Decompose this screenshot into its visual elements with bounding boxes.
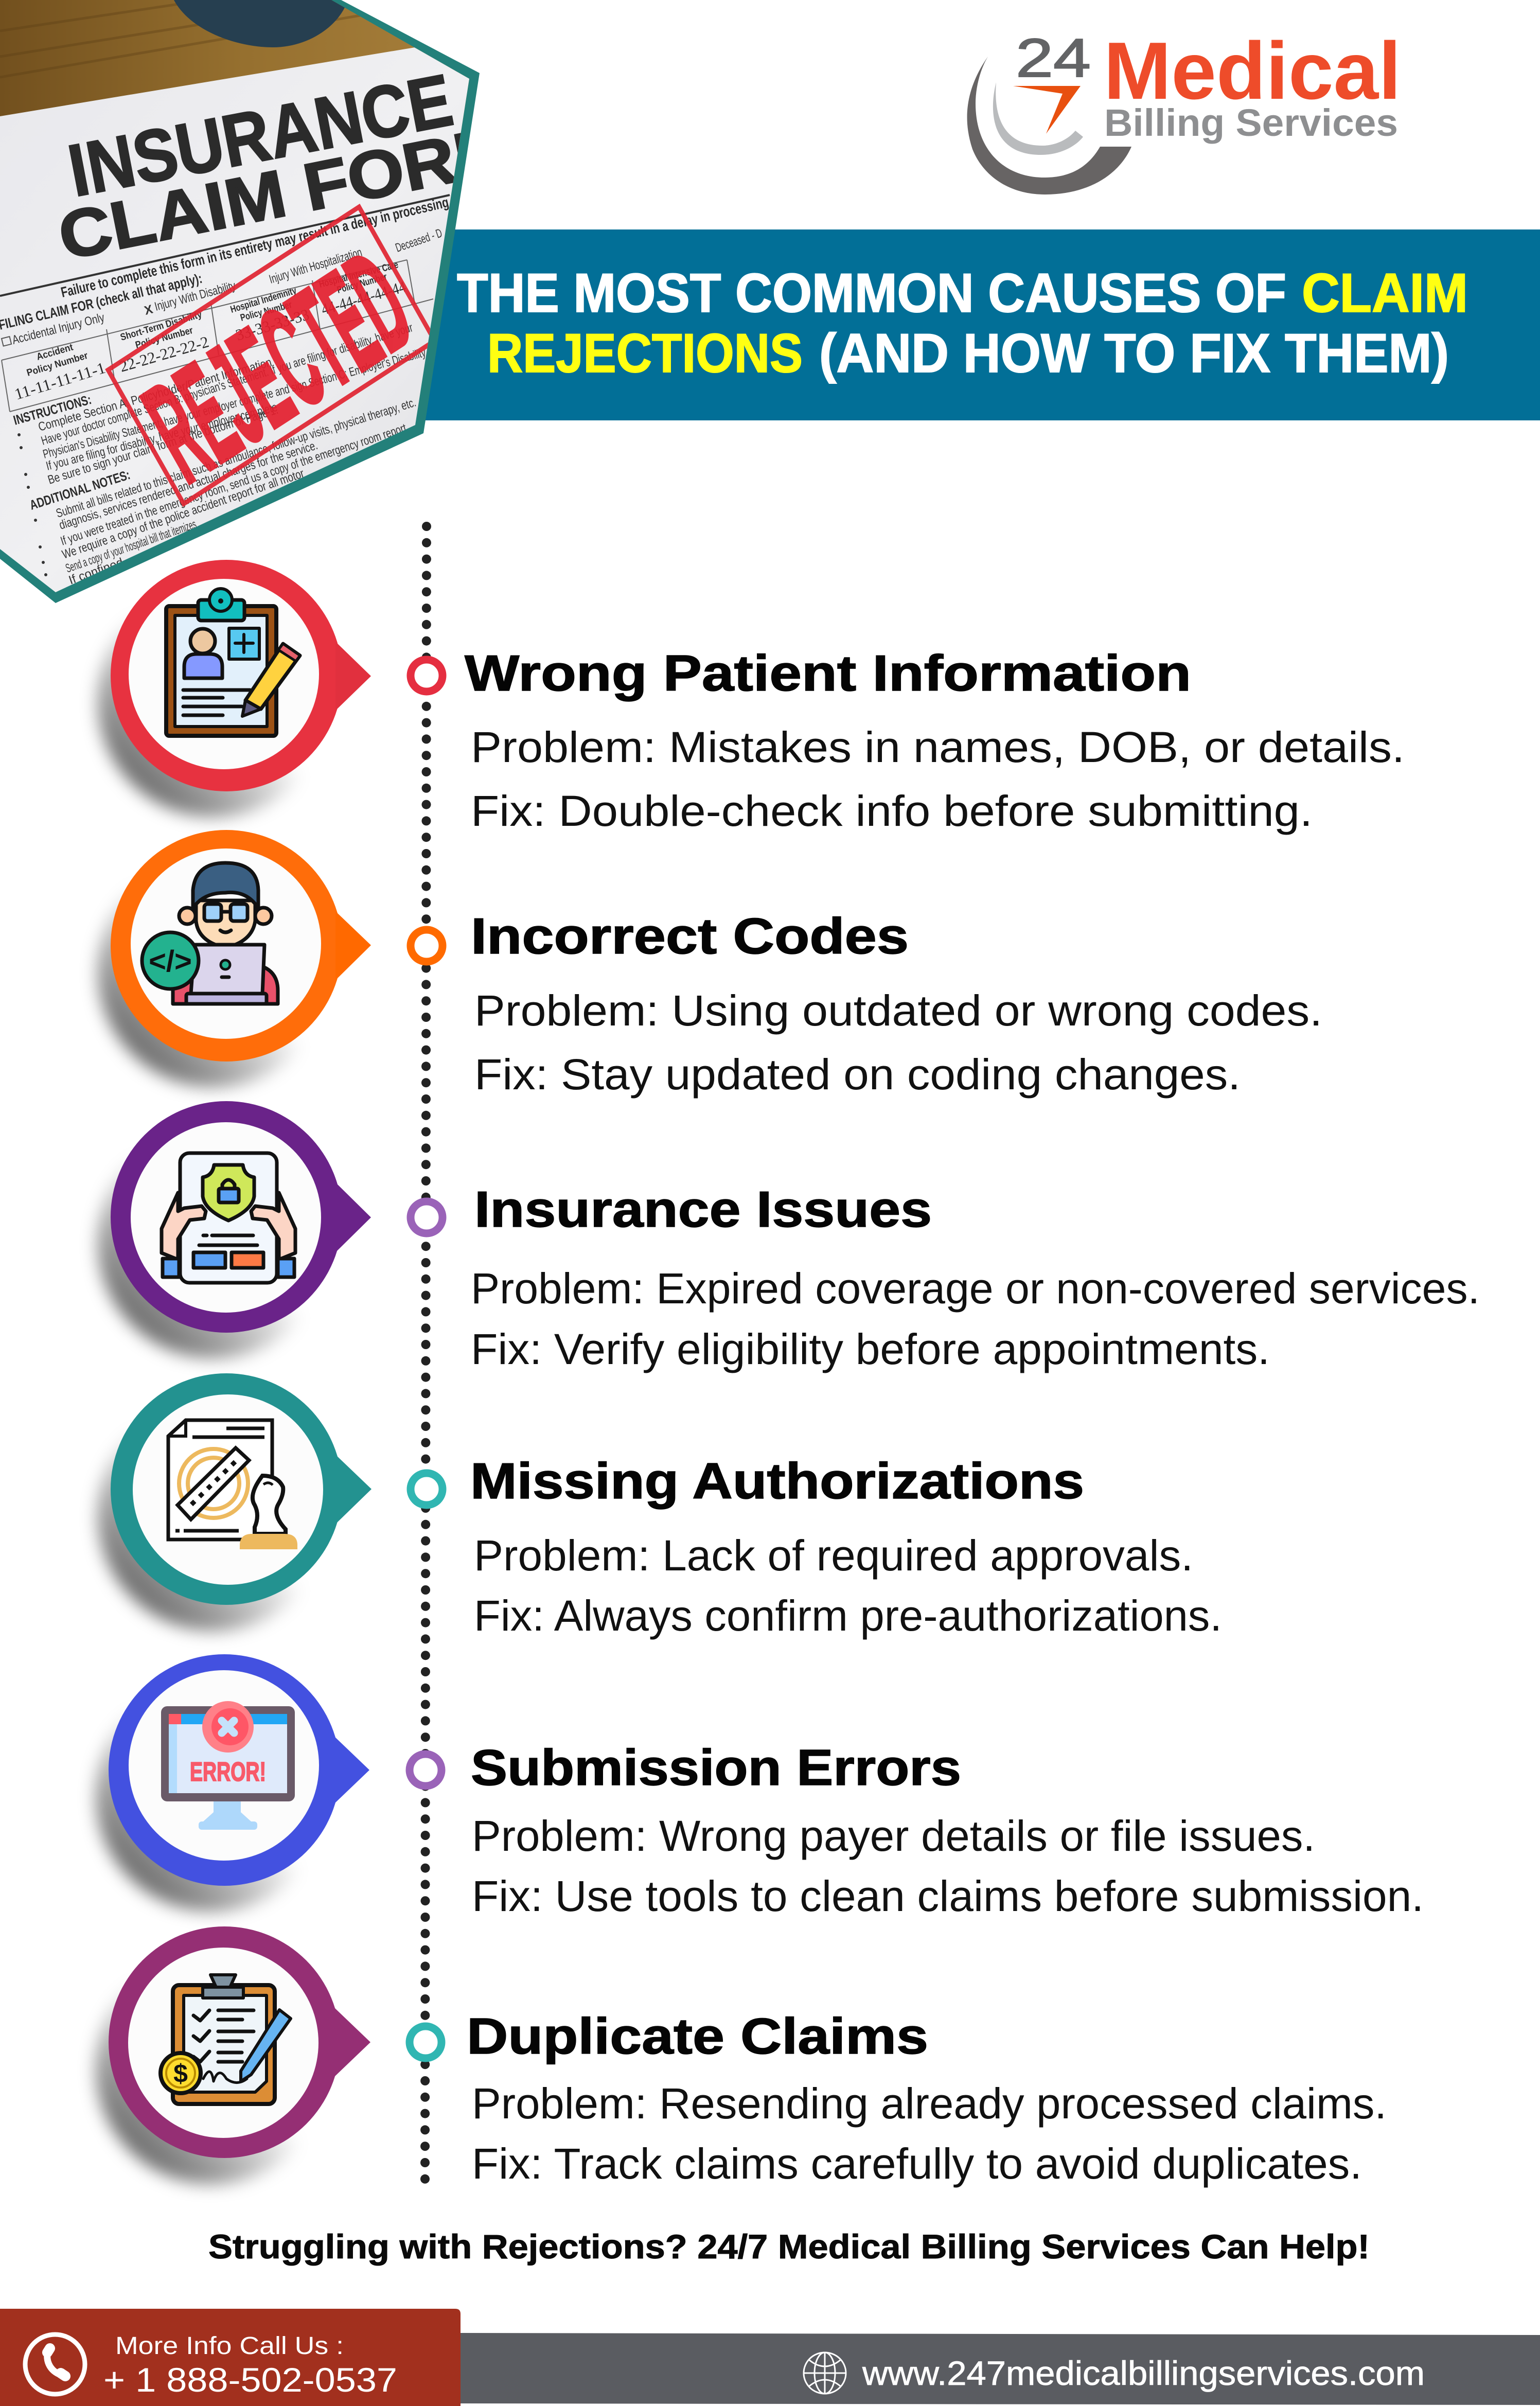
hero photo: rejected insurance claim form: Accidental Injury Only (11, 311, 106, 347)
hero photo: rejected insurance claim form: 22-22-22-22-2 (117, 332, 211, 376)
fix text: Fix: Double-check info before submitting. (471, 787, 1313, 835)
hero photo: rejected insurance claim form: Policy Number (25, 350, 90, 379)
heading: Insurance Issues (474, 1181, 932, 1237)
problem text: Problem: Using outdated or wrong codes. (474, 986, 1322, 1035)
title banner: REJECTIONS (487, 322, 803, 384)
hero photo: rejected insurance claim form: X (143, 303, 154, 318)
hero photo: rejected insurance claim form: Physician's Disability Statement; have your employer complete and sign Section C: Employer's Disability (42, 346, 427, 462)
hero photo: rejected insurance claim form: INSURANCE (62, 59, 458, 212)
badge: orange ring (98, 830, 371, 1087)
logo: 24 (1016, 28, 1091, 89)
hero photo: rejected insurance claim form: INSTRUCTIONS: (12, 392, 93, 428)
fix text: Fix: Stay updated on coding changes. (474, 1050, 1241, 1099)
icon: patient clipboard (166, 589, 300, 736)
timeline marker (411, 660, 442, 692)
timeline marker (410, 1754, 441, 1786)
item 6: duplicate claims (96, 1926, 1387, 2188)
hero photo: rejected insurance claim form: CLAIM FORM (52, 110, 521, 274)
item 3: insurance issues (98, 1101, 1480, 1373)
fix text: Fix: Always confirm pre-authorizations. (474, 1591, 1222, 1640)
icon: hands holding secure document (162, 1153, 295, 1283)
hero photo: rejected insurance claim form: Policy Number (239, 299, 293, 324)
logo: Billing Services (1104, 101, 1398, 144)
hero photo: rejected insurance claim form: Policy Number (134, 325, 194, 351)
icon: error monitor (161, 1701, 295, 1830)
hero photo: rejected insurance claim form (0, 0, 480, 603)
hero photo: rejected insurance claim form: Short-Term Disability (119, 309, 203, 343)
hero photo: rejected insurance claim form: Accident (36, 342, 75, 363)
hero photo: rejected insurance claim form: Hospital Intensive Care (318, 259, 399, 290)
item 4: missing authorizations (98, 1373, 1222, 1640)
timeline marker (411, 930, 442, 962)
hero photo: rejected insurance claim form: Hospital Indemnity (229, 285, 298, 315)
hero photo: rejected insurance claim form: FILING CLAIM FOR (check all that apply): (0, 271, 204, 333)
fix text: Fix: Verify eligibility before appointments. (471, 1325, 1270, 1373)
fix text: Fix: Track claims carefully to avoid duplicates. (472, 2139, 1362, 2188)
problem text: Problem: Wrong payer details or file issues. (472, 1812, 1315, 1860)
dotted timeline (425, 526, 427, 2180)
hero photo: rejected insurance claim form: diagnosis, services rendered and actual charges for the service. (58, 438, 320, 533)
hero photo: rejected insurance claim form: 44-44-44-44-44 (319, 277, 408, 319)
website address: www.247medicalbillingservices.com (862, 2354, 1425, 2392)
heading: Missing Authorizations (470, 1453, 1084, 1509)
problem text: Problem: Lack of required approvals. (474, 1531, 1193, 1580)
hero photo: rejected insurance claim form: Deceased - D (394, 226, 444, 255)
hero photo: rejected insurance claim form: We require a copy of the police accident report for all motor (60, 467, 306, 562)
badge: teal ring (98, 1373, 371, 1631)
item 5: submission errors (96, 1654, 1424, 1920)
hero photo: rejected insurance claim form: 33-33-33-33 (234, 305, 311, 344)
hero photo: rejected insurance claim form: Injury With Hospitalization (268, 245, 364, 287)
heading: Submission Errors (471, 1739, 961, 1796)
icon: clipboard with coin and pen: $ (173, 2059, 188, 2088)
timeline marker (411, 1473, 442, 1505)
icon: coder at laptop: </> (149, 945, 192, 978)
icon: phone (25, 2334, 85, 2394)
badge: magenta ring (96, 1926, 370, 2184)
logo: Medical (1104, 26, 1401, 116)
phone number: + 1 888-502-0537 (103, 2361, 397, 2399)
hero photo: rejected insurance claim form: Policy Number (336, 271, 388, 296)
heading: Incorrect Codes (471, 908, 909, 964)
hero photo: rejected insurance claim form: ADDITIONAL NOTES: (28, 467, 132, 513)
title banner: CLAIM (1302, 262, 1468, 324)
hero photo: rejected insurance claim form: Failure to complete this form in its entirety may result in a delay in processing (59, 194, 450, 300)
title banner (412, 229, 1540, 420)
call label: More Info Call Us : (115, 2332, 344, 2360)
icon: clipboard with coin and pen (161, 1975, 291, 2104)
badge: purple ring (98, 1101, 371, 1358)
hero photo: rejected insurance claim form: If confined (67, 555, 125, 588)
hero photo: rejected insurance claim form: Submit all bills related to this claim such as ambulance, follow-up visits, physical therapy, etc. (55, 396, 418, 521)
fix text: Fix: Use tools to clean claims before submission. (472, 1872, 1424, 1920)
icon: globe (804, 2352, 846, 2394)
hero photo: rejected insurance claim form: If you were treated in the emergency room, send us a copy of the emergency room report (59, 421, 408, 549)
problem text: Problem: Mistakes in names, DOB, or details. (471, 723, 1405, 771)
hero photo: rejected insurance claim form: 11-11-11-11-1 (12, 359, 108, 403)
icon: document with approval stamp (168, 1420, 297, 1549)
heading: Wrong Patient Information (465, 645, 1191, 701)
item 1: wrong patient information (98, 560, 1405, 835)
timeline marker (410, 2026, 441, 2058)
call to action: Struggling with Rejections? 24/7 Medical Billing Services Can Help! (208, 2227, 1370, 2266)
badge: red ring (98, 560, 371, 817)
problem text: Problem: Resending already processed claims. (472, 2079, 1387, 2128)
logo (967, 26, 1401, 194)
footer: phone panel (0, 2309, 461, 2406)
problem text: Problem: Expired coverage or non-covered services. (471, 1264, 1480, 1313)
title banner: (AND HOW TO FIX THEM) (819, 322, 1449, 384)
hero photo: rejected insurance claim form: Injury With Disability (153, 279, 237, 314)
item 2: incorrect codes (98, 830, 1322, 1099)
hero photo: rejected insurance claim form: Be sure to sign your claim form at the bottom of Page 1. (46, 403, 280, 487)
heading: Duplicate Claims (467, 2008, 928, 2064)
hero photo: rejected insurance claim form: If you are filing for disability, have your employer complete (45, 400, 279, 473)
hero photo: rejected insurance claim form: Complete Section A: Policyholder/Patient Information (37, 356, 273, 434)
timeline marker (411, 1201, 442, 1233)
icon: coder at laptop (142, 863, 278, 1004)
badge: blue ring (96, 1654, 369, 1912)
title banner: THE MOST COMMON CAUSES OF (457, 262, 1286, 324)
hero photo: rejected insurance claim form: Have your doctor complete Section B: physician's Statement. If you are filing for disability, have your (40, 321, 414, 448)
hero photo: rejected insurance claim form: Send a copy of your hospital bill that itemizes (64, 517, 198, 576)
footer: website bar (461, 2333, 1540, 2405)
icon: error monitor: ERROR! (190, 1757, 266, 1787)
